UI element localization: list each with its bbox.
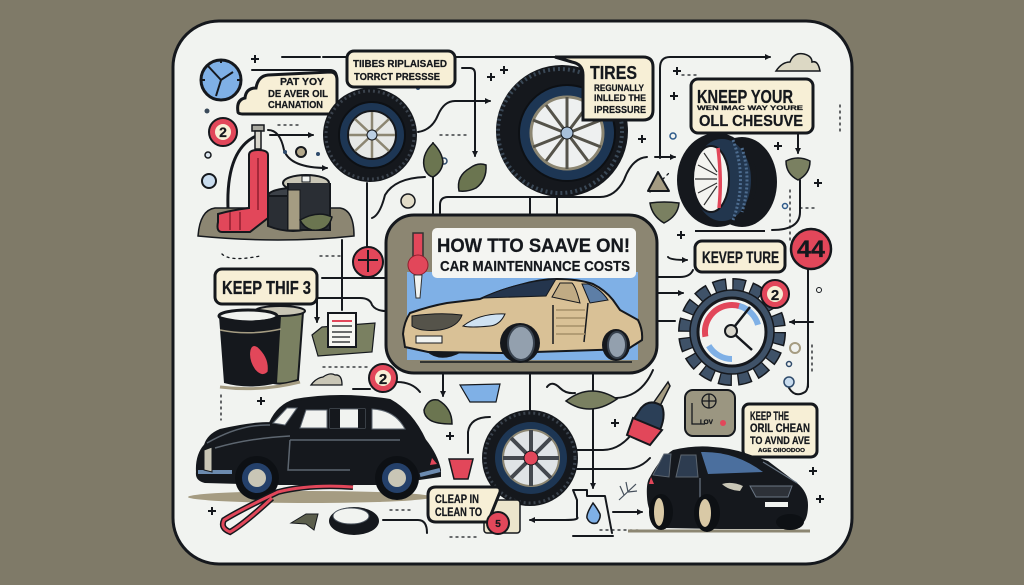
callout: keep the oil clean: KEEP THE — [750, 411, 789, 423]
badge: thermometer icon — [353, 247, 383, 277]
callout: keep your oil: WEN IMAC WAY YOURE — [697, 106, 803, 112]
callout: keep the oil clean: AGE OIIOODOO — [758, 448, 806, 454]
callout: keep your oil: OLL CHESUVE — [699, 113, 803, 130]
title box — [432, 228, 636, 278]
icon: leaf 1 — [424, 143, 443, 177]
icon: triangle marker — [648, 172, 669, 191]
callout: oil change: DE AVER OIL — [268, 89, 328, 100]
icon: tire top left — [323, 88, 417, 182]
callout: tires regularly inflated: REGUNALLY — [594, 83, 645, 94]
callout: keep your oil — [691, 79, 813, 133]
callout: keep the oil clean: TO AVND AVE — [750, 435, 810, 447]
icon: twig — [619, 482, 637, 500]
callout: keep the oil clean — [743, 404, 817, 457]
icon: red cup — [449, 459, 473, 479]
main panel — [173, 21, 852, 564]
icon: red hose highlight — [223, 486, 353, 532]
icon: clock — [201, 59, 241, 100]
icon: big tire — [496, 65, 628, 197]
icon: thermometer — [408, 233, 428, 298]
callout: keep this — [215, 269, 317, 304]
callout: oil change: PAT YOY — [280, 77, 324, 88]
callout: tires regularly inflated: TIRES — [590, 63, 637, 83]
callout: keep ture — [695, 241, 785, 272]
callout: tires replaced: TORRCT PRESSSE — [354, 72, 440, 83]
callout: keep the oil clean: ORIL CHEAN — [750, 423, 810, 435]
callout: oil change — [238, 72, 337, 114]
title box: HOW TTO SAAVE ON! — [437, 236, 630, 257]
callout: clean: 5 — [495, 519, 501, 530]
callout: tires regularly inflated: IPRESSURE — [594, 105, 646, 116]
beige sedan — [403, 279, 642, 363]
callout: keep ture: KEVEP TURE — [702, 248, 779, 267]
icon: tire ring — [329, 507, 379, 535]
icon: shield marker — [650, 202, 679, 223]
icon: red hose — [223, 486, 353, 532]
callout: tires regularly inflated — [555, 57, 653, 120]
icon: leaf 3 — [424, 400, 452, 424]
icon: oil injector — [627, 382, 670, 445]
callout: keep this: KEEP THIF 3 — [222, 278, 311, 298]
icon: badge 2: 2 — [219, 124, 227, 140]
panel: central title — [386, 215, 657, 373]
icon: badge 2 middle — [369, 364, 397, 392]
icon: water drop — [587, 503, 600, 523]
badge: 44: 44 — [797, 236, 826, 263]
callout: tires replaced: TIIBES RIPLAISAED — [353, 59, 447, 70]
icon: oil buckets — [219, 306, 305, 389]
callout: clean: CLEAP IN — [435, 494, 479, 506]
icon: cloud — [776, 54, 820, 71]
badge: 2 on gauge: 2 — [771, 287, 779, 304]
icon: badge 2 — [209, 118, 237, 146]
callout: clean — [428, 487, 520, 534]
decorative dots and plus marks — [202, 55, 840, 537]
icon: leaf 4 — [566, 391, 617, 409]
callout: clean: CLEAN TO — [435, 507, 482, 519]
icon: shards — [291, 514, 318, 530]
icon: bottom tire — [482, 410, 578, 506]
icon: tire side view — [677, 133, 777, 231]
icon: device — [685, 390, 735, 436]
callout: oil change: CHANATION — [268, 100, 323, 111]
icon: small cloud — [311, 374, 342, 385]
black modern car — [628, 446, 810, 532]
icon: device: I OV — [700, 419, 714, 426]
badge: 2 on gauge — [761, 280, 789, 308]
title box: CAR MAINTENNANCE COSTS — [440, 258, 630, 275]
callout: keep your oil: KNEEP YOUR — [697, 87, 793, 107]
icon: badge 2 middle: 2 — [379, 371, 387, 388]
icon: document — [312, 313, 375, 356]
blue sky panel — [407, 272, 638, 360]
icon: oil pump and tire stack — [198, 125, 354, 240]
connector lines and arrows — [252, 57, 813, 536]
gauge gear — [686, 286, 778, 378]
callout: tires regularly inflated: INLLED THE — [594, 93, 646, 104]
badge: 44 — [791, 229, 831, 269]
vintage black car — [188, 396, 440, 503]
icon: leaf 2 — [458, 164, 486, 191]
icon: blue paper — [460, 384, 500, 402]
callout: tires replaced — [347, 51, 455, 87]
icon: heart leaf — [786, 158, 810, 180]
